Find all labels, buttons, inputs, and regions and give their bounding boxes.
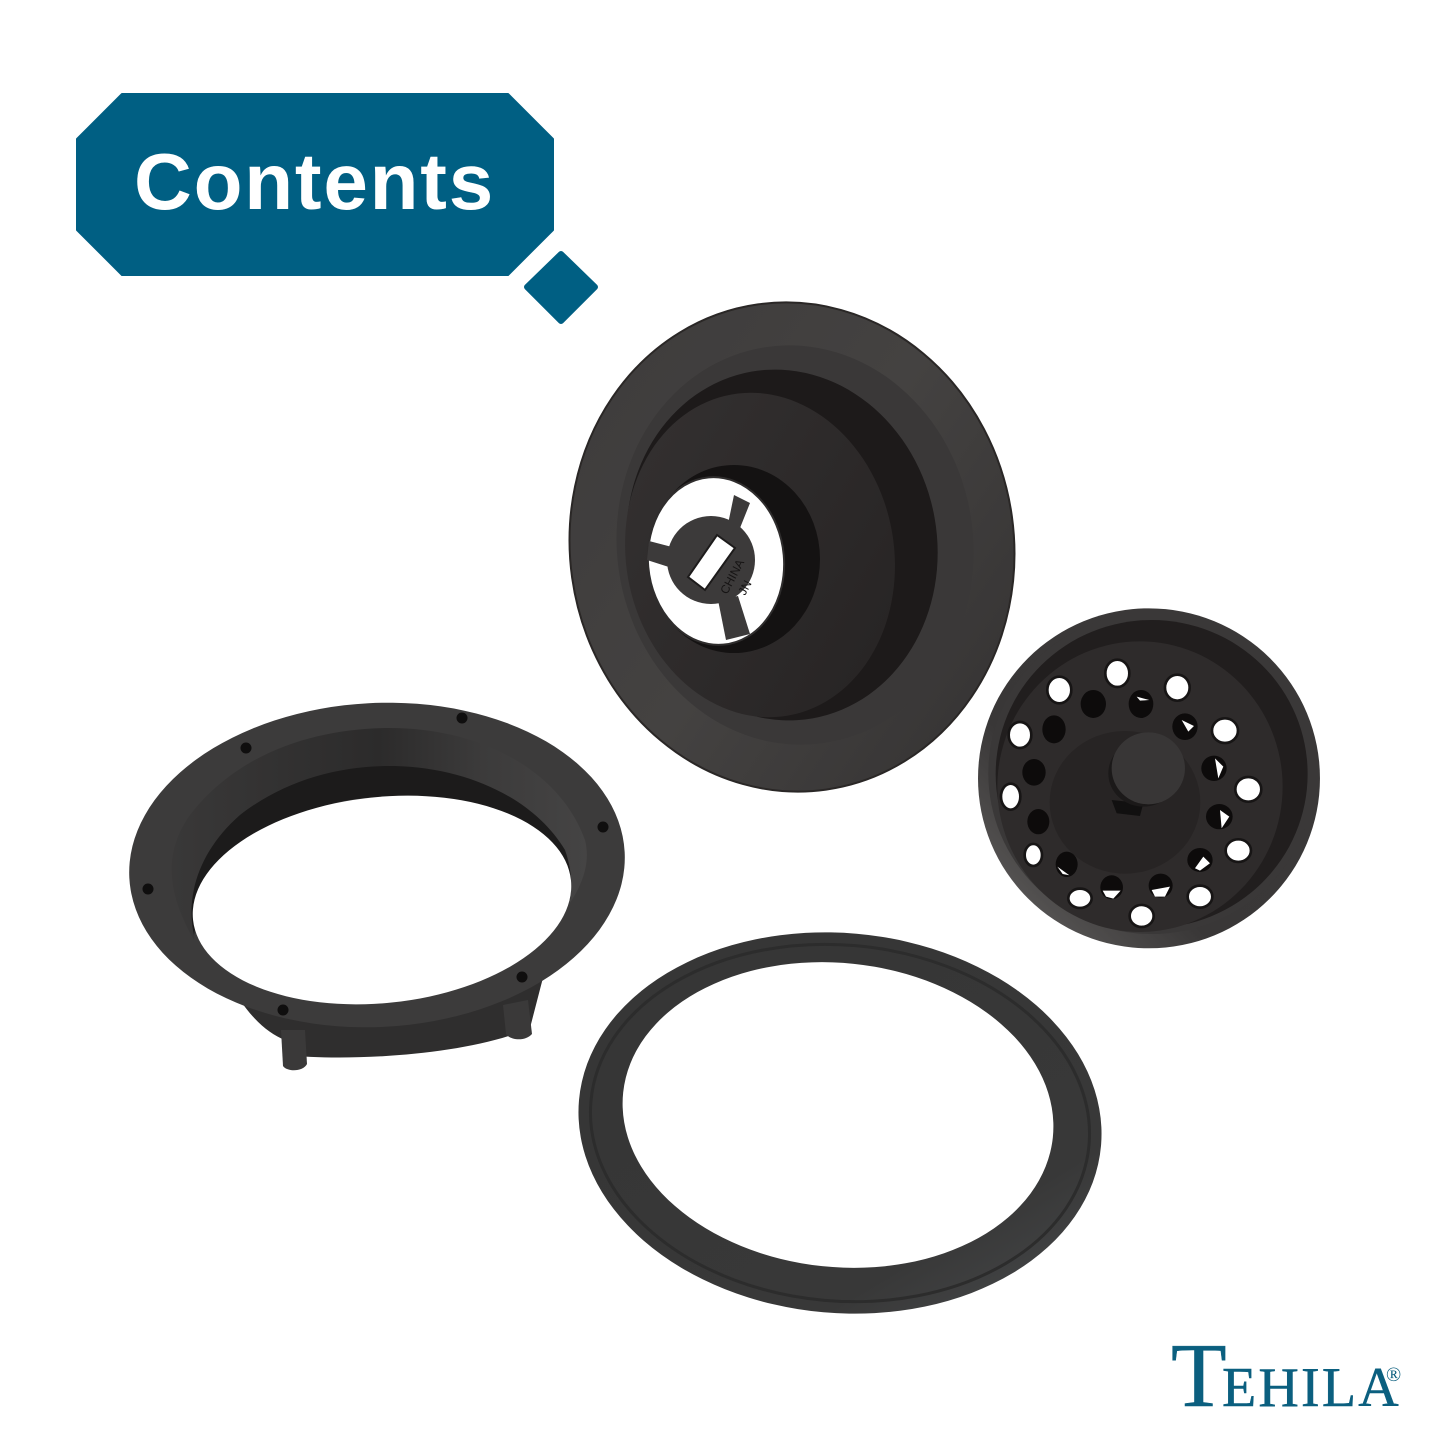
slot: [688, 535, 735, 590]
gasket opening: [607, 941, 1069, 1289]
product part: rubber gasket: [562, 911, 1118, 1335]
centre disc: [1050, 731, 1200, 874]
lower body and legs: [240, 970, 545, 1070]
moulded text: CHINA: [717, 557, 747, 596]
centre opening: [182, 778, 582, 1022]
product part: drain flange: [538, 273, 1046, 821]
light slivers in shadowed holes: [1057, 697, 1229, 899]
callout diamond: [527, 254, 595, 321]
product part: threaded mounting ring: [121, 690, 633, 1070]
recess: [599, 345, 965, 745]
drain throat: [648, 465, 820, 653]
spider crossbar: [647, 495, 755, 640]
base plate: [997, 641, 1283, 932]
product part: drain flange: JN: [735, 578, 755, 597]
heading badge: Contents: [77, 94, 553, 275]
heading text: Contents: [134, 137, 495, 226]
shadowed holes: [1022, 690, 1233, 899]
inner cone: [172, 728, 587, 940]
brand logo: Tehila: T: [1171, 1325, 1227, 1426]
brand logo: Tehila: ®: [1386, 1364, 1401, 1386]
screw holes: [142, 712, 608, 1016]
brand logo: Tehila: EHILA: [1222, 1357, 1401, 1419]
brand logo: Tehila: [1171, 1325, 1401, 1426]
product part: strainer basket: [978, 608, 1320, 948]
flange: [121, 690, 633, 1040]
threads: [191, 766, 571, 935]
through holes: [1001, 660, 1261, 927]
through hole: [641, 471, 791, 651]
knob: [1112, 800, 1143, 816]
inner disc: [600, 371, 920, 739]
